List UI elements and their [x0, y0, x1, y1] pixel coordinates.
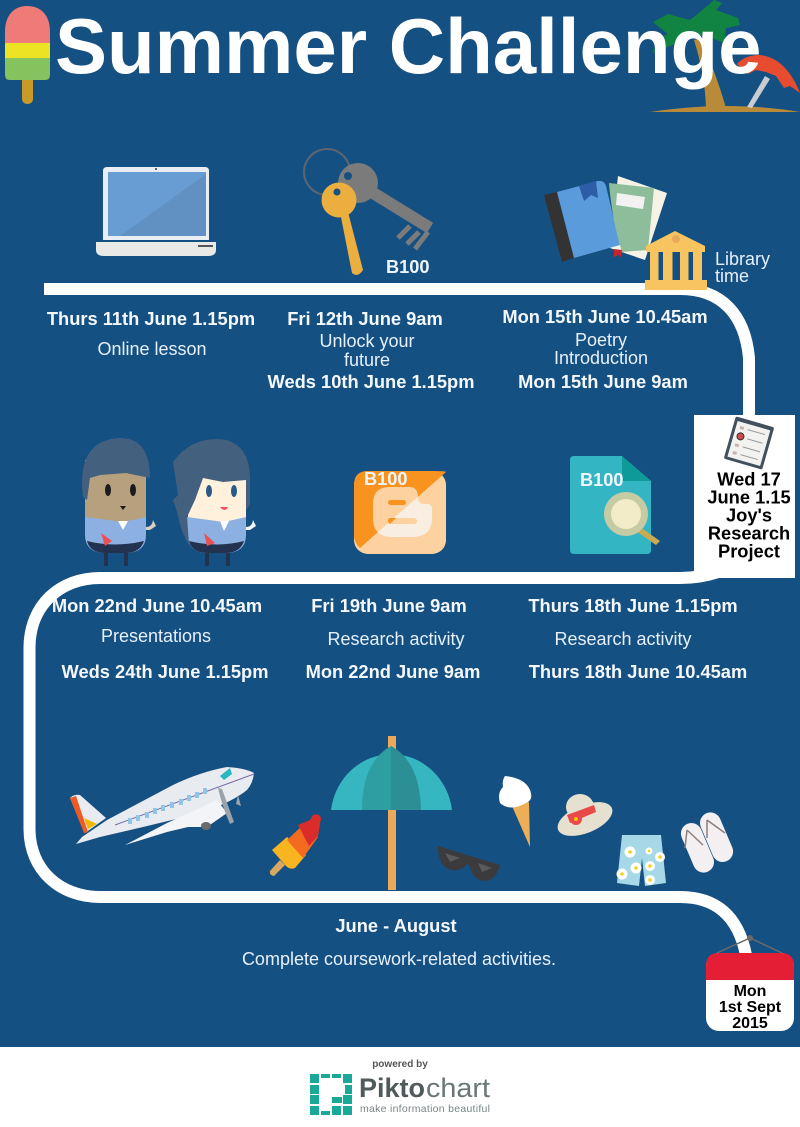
icon: sun hat: [553, 794, 617, 843]
column: Monday 22 June: Mon 22nd June 10.45am: [52, 595, 262, 616]
footer logo: [310, 1059, 491, 1115]
icon: sunglasses: [438, 846, 500, 881]
icon: airplane: [70, 767, 254, 845]
title: Summer Challenge: [55, 2, 762, 90]
column: Friday 19 June: Mon 22nd June 9am: [306, 661, 480, 682]
footer band: [0, 1047, 800, 1127]
column: Monday 15 June: Mon 15th June 9am: [518, 371, 688, 392]
column: Monday 22 June: Weds 24th June 1.15pm: [62, 661, 268, 682]
icon: flip flops: [678, 809, 736, 876]
column: Monday 15 June: Poetry: [575, 330, 627, 350]
icon: calendar: 2015: [732, 1015, 768, 1032]
icon: search document: [570, 456, 660, 554]
label: Library time: Library: [715, 249, 770, 269]
icon: female character: [173, 439, 256, 566]
footer logo: Pikto: [359, 1073, 425, 1103]
column: Monday 15 June: [502, 306, 708, 392]
callout: research project: [694, 415, 795, 578]
icon: library building: [645, 231, 707, 290]
icon: ice cream: [499, 776, 531, 847]
column: Friday 12 June: Weds 10th June 1.15pm: [268, 371, 474, 392]
callout: research project: Joy's: [726, 504, 772, 526]
block: June to August: [242, 915, 556, 969]
icon: palm tree island: [650, 0, 800, 112]
icon: popsicle: [5, 6, 50, 104]
icon: rocket popsicle: [270, 814, 321, 876]
footer logo: make information beautiful: [360, 1103, 490, 1115]
icon: calendar: Mon: [734, 983, 766, 1000]
icon: search document: B100: [580, 470, 623, 490]
block: June to August: Complete coursework-related activities.: [242, 949, 556, 969]
column: Friday 19 June: Fri 19th June 9am: [311, 595, 467, 616]
label: Library time: time: [715, 266, 749, 286]
icon: calendar: 1st Sept: [719, 999, 782, 1016]
icon: calendar: [706, 935, 794, 1032]
icon: keys: [304, 149, 430, 275]
callout: research project: June 1.15: [707, 486, 791, 508]
icon: Piktochart mark: [310, 1074, 352, 1115]
column: Thursday 18 June: Thurs 18th June 10.45am: [529, 661, 747, 682]
icon: blogger: B100: [364, 469, 407, 489]
icon: laptop: [96, 167, 216, 256]
column: Thursday 18 June: Research activity: [554, 629, 692, 649]
footer logo: chart: [426, 1073, 491, 1103]
label: B100: B100: [386, 257, 429, 277]
timeline path: [30, 289, 749, 955]
column: Friday 12 June: Fri 12th June 9am: [287, 308, 443, 329]
column: Thursday 18 June: Thurs 18th June 1.15pm: [528, 595, 738, 616]
callout: research project: Research: [708, 522, 790, 544]
column: Thursday 11 June: Online lesson: [97, 339, 207, 359]
callout: research project: Project: [718, 540, 780, 562]
column: Monday 15 June: Mon 15th June 10.45am: [502, 306, 708, 327]
column: Thursday 11 June: [47, 308, 255, 359]
icon: clipboard: [724, 416, 774, 470]
label: Library time: [715, 249, 770, 286]
column: Friday 19 June: Research activity: [327, 629, 465, 649]
icon: beach umbrella: [331, 736, 452, 890]
column: Friday 12 June: future: [344, 350, 390, 370]
column: Monday 15 June: Introduction: [554, 348, 648, 368]
block: June to August: June - August: [335, 915, 457, 936]
icon: blogger: [354, 469, 446, 554]
column: Friday 12 June: Unlock your: [319, 331, 415, 351]
footer logo: powered by: [372, 1059, 428, 1070]
column: Friday 12 June: [268, 308, 474, 392]
column: Monday 22 June: Presentations: [101, 626, 211, 646]
icon: male character: [82, 438, 156, 566]
column: Thursday 11 June: Thurs 11th June 1.15pm: [47, 308, 255, 329]
column: Thursday 18 June: [528, 595, 747, 682]
icon: books: [544, 176, 667, 262]
icon: swim shorts: [616, 835, 666, 886]
column: Monday 22 June: [52, 595, 268, 682]
column: Friday 19 June: [306, 595, 480, 682]
callout: research project: Wed 17: [717, 468, 781, 490]
